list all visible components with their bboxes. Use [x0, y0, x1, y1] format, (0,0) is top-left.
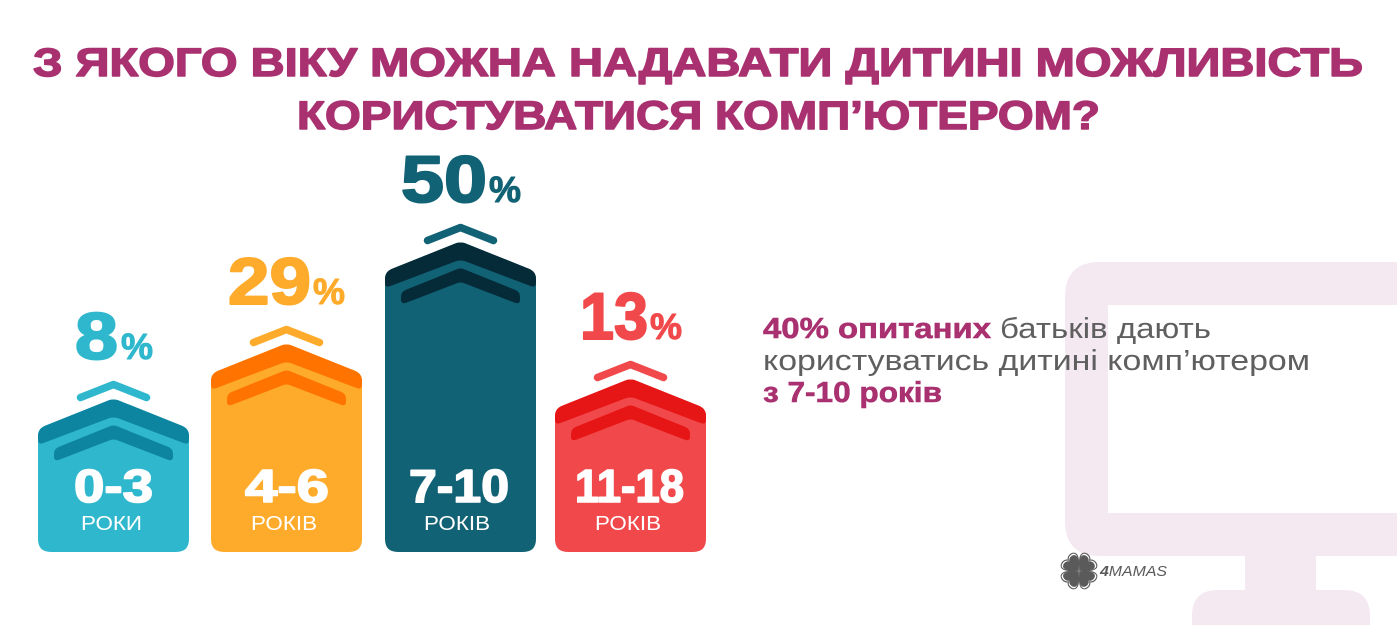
bar: 7-10 years, 50%	[385, 142, 536, 552]
percentage: 13%: %	[650, 306, 682, 347]
percentage: 50%: 50	[401, 142, 487, 216]
label: 7-10 років: РОКІВ	[424, 513, 490, 535]
percentage: 50%: %	[489, 169, 521, 210]
label: 11-18 років: 11-18	[575, 460, 684, 512]
logo wordmark: 4MAMAS	[1099, 563, 1167, 580]
callout text: 40% of respondents: користуватись дитині комп’ютером	[763, 345, 1310, 377]
label: 4-6 років: 4-6	[245, 460, 329, 512]
title: КОРИСТУВАТИСЯ КОМП’ЮТЕРОМ?	[297, 94, 1100, 138]
label: 4-6 років: РОКІВ	[251, 513, 317, 535]
label: 7-10 років	[409, 460, 509, 535]
percentage: 29%: 29	[228, 244, 311, 318]
arrow roof: 0-3	[38, 384, 189, 552]
arrow roof: 7-10	[385, 228, 536, 552]
label: 7-10 років: 7-10	[409, 460, 509, 512]
percentage: 13%: 13	[580, 279, 648, 353]
callout text: 40% of respondents	[763, 313, 1310, 409]
callout text: 40% of respondents: батьків дають	[1000, 313, 1211, 345]
bar: 11-18 years, 13%	[555, 279, 706, 552]
title	[33, 41, 1363, 138]
percentage: 8%: 8	[75, 299, 118, 373]
label: 0-3 роки: 0-3	[74, 460, 153, 512]
percentage: 29%	[228, 244, 345, 318]
title: З ЯКОГО ВІКУ МОЖНА НАДАВАТИ ДИТИНІ МОЖЛИВІСТЬ	[33, 41, 1363, 85]
icon: computer monitor watermark	[1065, 262, 1397, 625]
arrow roof: 4-6	[211, 330, 362, 552]
label: 4-6 років	[245, 460, 329, 535]
percentage: 50%	[401, 142, 521, 216]
percentage: 8%	[75, 299, 153, 373]
label: 0-3 роки	[74, 460, 153, 535]
callout text: 40% of respondents: 40% опитаних	[763, 313, 991, 345]
bar: 0-3 years, 8%	[38, 299, 189, 552]
arrow roof: 11-18	[555, 364, 706, 552]
callout text: 40% of respondents: з 7-10 років	[763, 377, 942, 409]
percentage: 8%: %	[121, 326, 153, 367]
icon: four-leaf clover	[1059, 551, 1099, 591]
bar: 4-6 years, 29%	[211, 244, 362, 552]
label: 0-3 роки: РОКИ	[81, 513, 142, 535]
label: 11-18 років	[575, 460, 684, 535]
percentage: 29%: %	[313, 271, 345, 312]
label: 11-18 років: РОКІВ	[595, 513, 661, 535]
logo: 4MAMAS	[1059, 551, 1167, 591]
